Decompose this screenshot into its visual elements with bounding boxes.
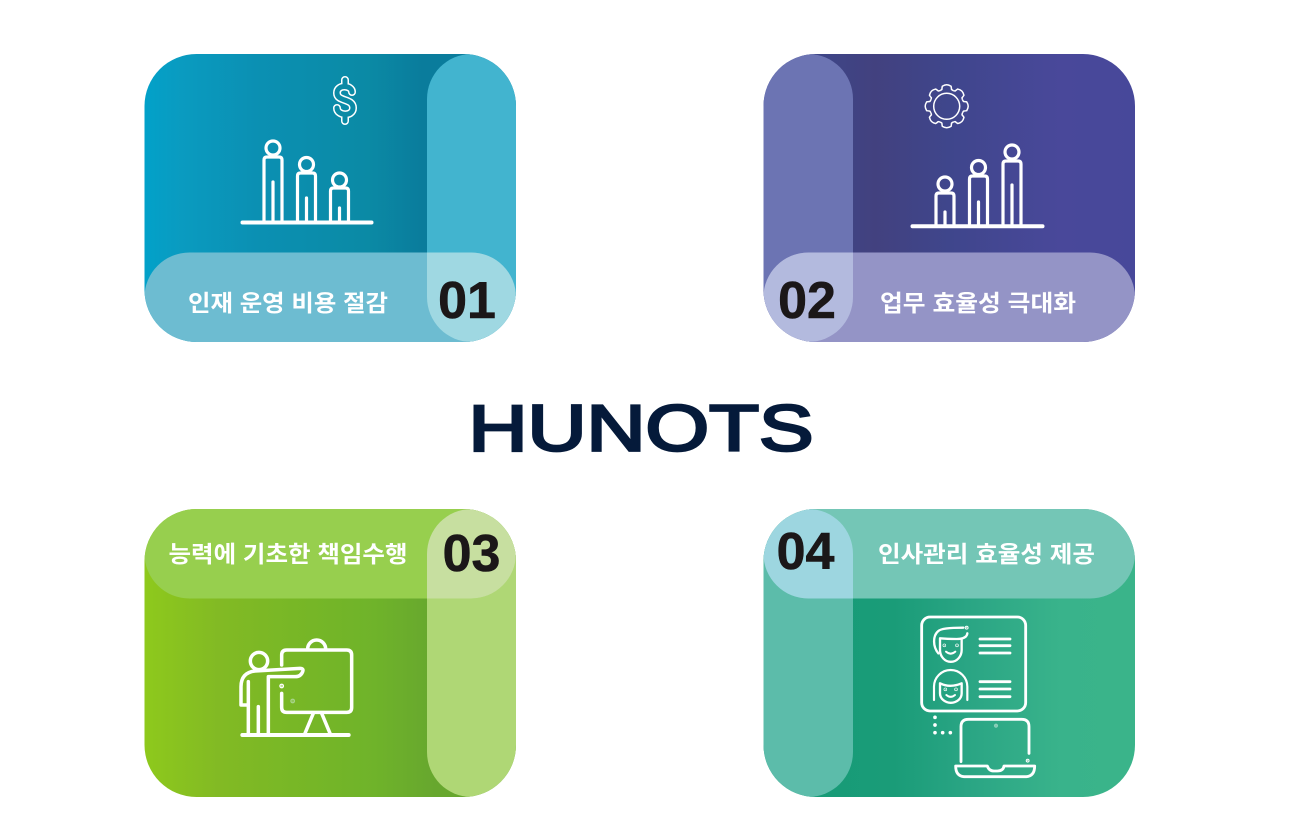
number 04: 04	[777, 523, 834, 581]
heading: card 01: 인재 운영 비용 절감	[188, 290, 388, 316]
heading: card 03: 능력에 기초한 책임수행	[168, 541, 408, 567]
number 02: 02	[778, 272, 836, 330]
heading: card 02: 업무 효율성 극대화	[880, 290, 1076, 316]
logo: HUNOTS: HUNOTS	[468, 392, 814, 465]
icon: presenter at board	[241, 640, 352, 735]
icon: gear	[925, 85, 968, 128]
number 03: 03	[443, 525, 500, 583]
icon: descending people bar chart	[242, 141, 372, 222]
heading: card 04: 인사관리 효율성 제공	[878, 541, 1095, 567]
icon: dollar sign	[337, 80, 353, 121]
icon: ascending people bar chart	[912, 145, 1042, 226]
panel: card 04 HR efficiency	[764, 509, 1135, 797]
panel: card 03 competency based	[144, 509, 516, 797]
number 01: 01	[438, 272, 496, 330]
infographic canvas	[144, 54, 1135, 797]
panel: card 02 work efficiency	[764, 54, 1135, 342]
icon: profiles on tablet and laptop	[922, 617, 1035, 777]
panel: card 01 cost saving	[144, 54, 516, 342]
